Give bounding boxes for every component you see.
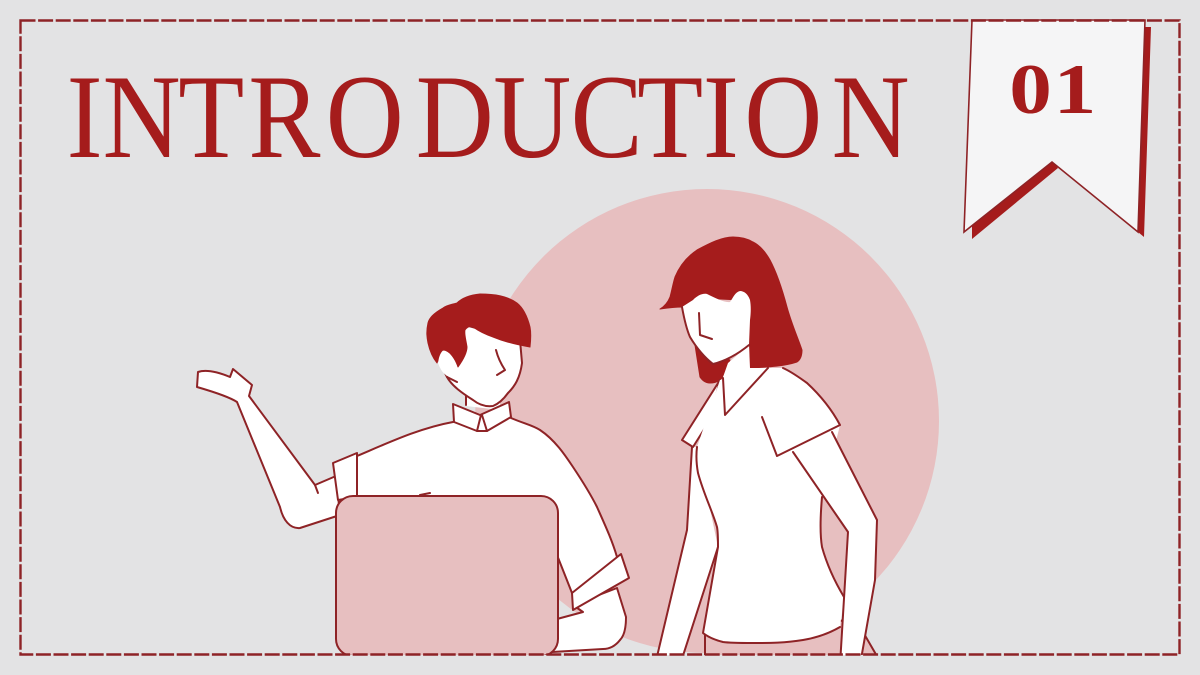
woman: torso xyxy=(696,368,844,643)
woman: right arm xyxy=(823,442,876,655)
illustration: two people at a laptop xyxy=(197,189,939,670)
section number: 01 xyxy=(1009,50,1096,128)
man: collar xyxy=(453,402,511,431)
title: INTRODUCTION xyxy=(67,50,910,183)
woman: right sleeve xyxy=(812,389,836,420)
pink background circle xyxy=(475,189,939,653)
section number ribbon xyxy=(964,20,1151,239)
woman: left arm xyxy=(659,447,717,655)
ribbon shadow xyxy=(972,27,1151,239)
woman: hair front xyxy=(660,237,802,368)
man: right shirt cuff xyxy=(572,554,629,610)
man: hair xyxy=(427,294,531,367)
man: nose and jaw lines xyxy=(420,350,505,495)
woman: face xyxy=(682,291,751,364)
woman: nose xyxy=(699,313,712,339)
man: torso xyxy=(358,418,616,592)
man: left shirt cuff xyxy=(333,453,357,500)
man: ear xyxy=(438,351,457,376)
laptop xyxy=(336,496,558,656)
woman figure xyxy=(655,237,885,670)
man: raised arm and hand xyxy=(197,369,340,528)
woman: hair back xyxy=(695,345,730,383)
woman: left sleeve xyxy=(682,380,720,447)
man: forearm and hand behind laptop xyxy=(552,588,626,652)
man: face xyxy=(436,325,522,406)
woman: neck xyxy=(723,346,766,379)
man: neck xyxy=(466,398,500,409)
woman: pants xyxy=(704,620,876,655)
man figure xyxy=(197,294,629,656)
ribbon body xyxy=(964,20,1145,232)
